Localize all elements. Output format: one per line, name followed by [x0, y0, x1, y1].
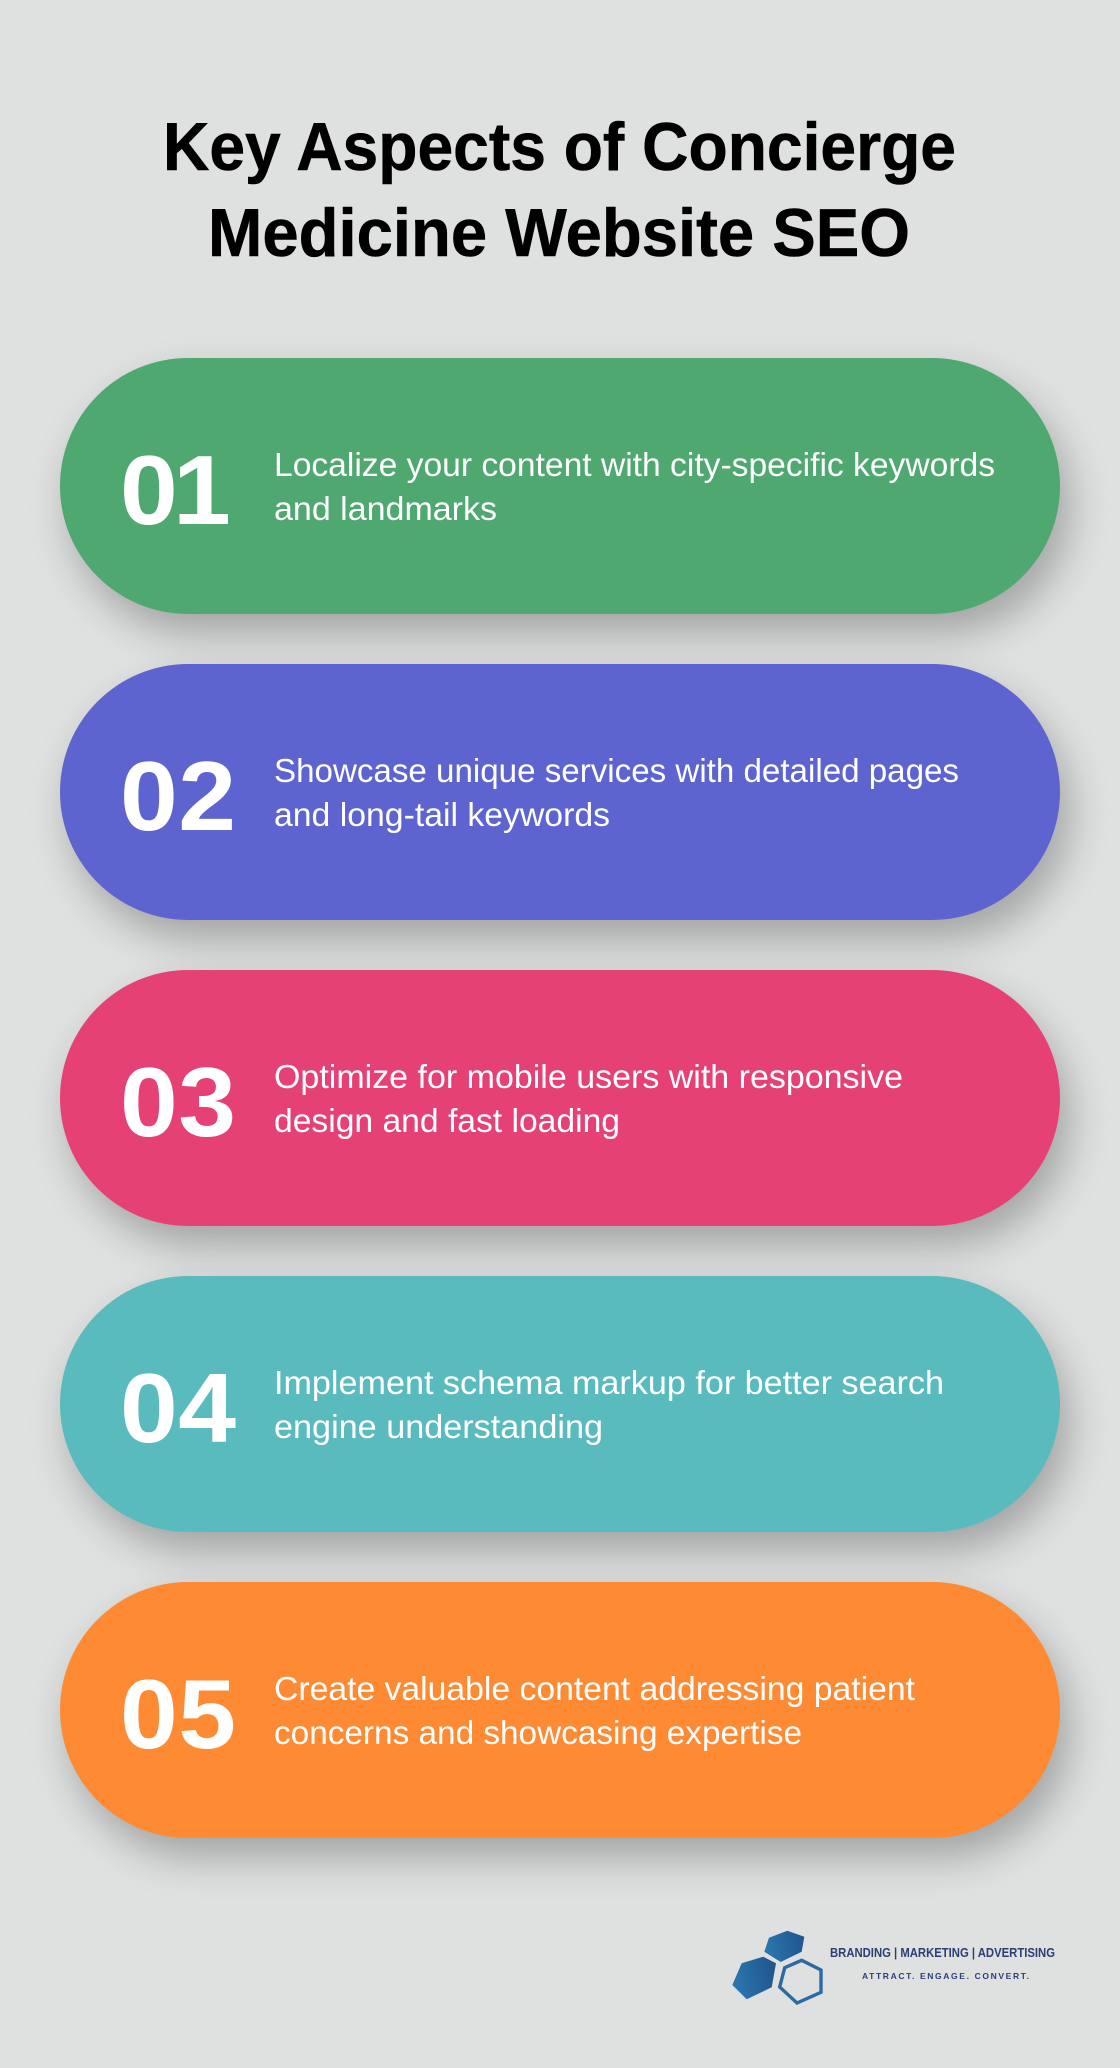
title: [163, 109, 956, 271]
step text 05: concerns and showcasing expertise: [274, 1714, 802, 1751]
step text 03: design and fast loading: [274, 1102, 620, 1139]
step number 03: 03: [120, 1049, 236, 1157]
step text 01: [274, 446, 995, 527]
icon: left filled hexagon: [732, 1957, 776, 1999]
step text 05: Create valuable content addressing patient: [274, 1670, 915, 1707]
step text 02: and long-tail keywords: [274, 796, 610, 833]
step text 04: Implement schema markup for better search: [274, 1364, 944, 1401]
step number 04: 04: [120, 1355, 236, 1463]
step text 04: engine understanding: [274, 1408, 603, 1445]
step text 03: [274, 1058, 903, 1139]
title: Medicine Website SEO: [208, 195, 910, 271]
logo: [732, 1930, 1055, 2005]
step text 02: [274, 752, 959, 833]
panel: step 02: [60, 664, 1060, 920]
step text 01: and landmarks: [274, 490, 497, 527]
title: Key Aspects of Concierge: [163, 109, 956, 185]
step text 02: Showcase unique services with detailed pages: [274, 752, 959, 789]
icon: outlined hexagon: [780, 1960, 821, 2003]
step text 05: [274, 1670, 915, 1751]
logo tagline: services: BRANDING | MARKETING | ADVERTISING: [830, 1945, 1055, 1960]
icon: top filled hexagon: [764, 1931, 804, 1962]
logo tagline: attract engage convert: ATTRACT. ENGAGE. CONVERT.: [862, 1971, 1029, 1981]
step number 01: 01: [120, 437, 231, 545]
panel: step 01: [60, 358, 1060, 614]
step number 02: 02: [120, 743, 236, 851]
step number 05: 05: [120, 1661, 236, 1769]
panel: step 05: [60, 1582, 1060, 1838]
step text 03: Optimize for mobile users with responsive: [274, 1058, 903, 1095]
panel: step 03: [60, 970, 1060, 1226]
step text 01: Localize your content with city-specific keywords: [274, 446, 995, 483]
step text 04: [274, 1364, 944, 1445]
panel: step 04: [60, 1276, 1060, 1532]
